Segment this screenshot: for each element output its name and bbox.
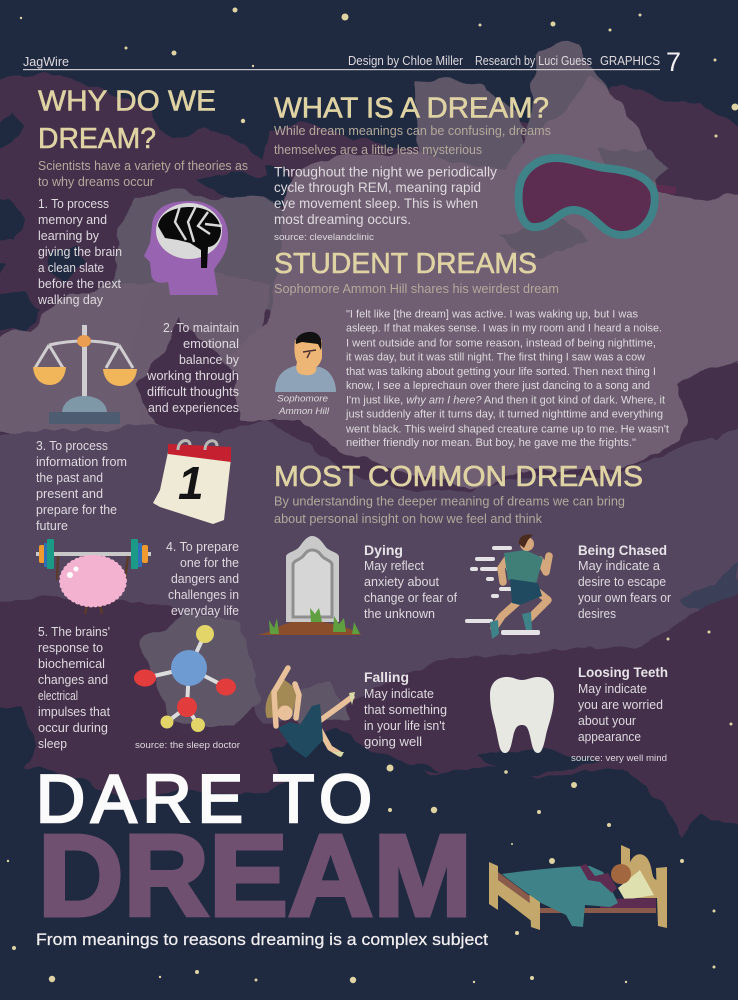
theory 5 text: occur during: [38, 720, 108, 735]
dream: loosing teeth: you are worried: [578, 697, 663, 712]
icon: person sleeping in bed: [489, 845, 667, 930]
dream: loosing teeth: May indicate: [578, 681, 647, 696]
dream: dying: May reflect: [364, 558, 424, 573]
heading: student dreams: STUDENT DREAMS: [274, 248, 537, 280]
quote: asleep. If that makes sense. I was in my room and I heard a noise.: [346, 323, 662, 335]
dream: being chased: your own fears or: [578, 590, 672, 605]
source: sleep doctor: source: the sleep doctor: [135, 740, 240, 751]
theory 2 text: difficult thoughts: [147, 384, 239, 399]
dream: dying: [364, 542, 457, 621]
theory 1 text: learning by: [38, 228, 100, 243]
theory 5 text: [38, 624, 110, 751]
icon: tear-off calendar: [153, 441, 231, 524]
icon: molecule: [134, 625, 236, 732]
dream: falling: Falling: [364, 669, 409, 685]
theory 3 text: present and: [36, 486, 103, 501]
theory 4 text: everyday life: [171, 603, 239, 618]
dream: falling: May indicate: [364, 686, 434, 701]
theory 5 text: sleep: [38, 736, 67, 751]
subheading: about personal insight on how we feel and think: [274, 511, 542, 526]
theory 5 text: biochemical: [38, 656, 105, 671]
panel: what is a dream: [274, 92, 676, 243]
theory 5 text: electrical: [38, 688, 78, 703]
theory 2 text: working through: [146, 368, 239, 383]
caption: portrait: [277, 394, 330, 417]
theory 3 text: information from: [36, 454, 127, 469]
quote: went black. This weird shaped creature came up to me. He wasn't: [345, 423, 669, 435]
icon: running man: [465, 534, 549, 639]
body text: Throughout the night we periodically: [274, 164, 497, 180]
icon: balance scale: [33, 325, 137, 424]
dream: falling: that something: [364, 702, 447, 717]
subheading: [274, 494, 625, 526]
heading: what is a dream: WHAT IS A DREAM?: [274, 92, 549, 124]
theory 3 text: the past and: [36, 470, 103, 485]
theory 1 text: 1. To process: [38, 196, 109, 211]
portrait: Ammon Hill: [275, 332, 336, 392]
header bar: Design by Chloe Miller: [348, 54, 463, 68]
subheading: [274, 123, 551, 157]
dream: loosing teeth: Loosing Teeth: [578, 664, 668, 680]
subheading: Sophomore Ammon Hill shares his weirdest dream: [274, 281, 559, 296]
theory 2 text: balance by: [179, 352, 240, 367]
dream: being chased: May indicate a: [578, 558, 661, 573]
header bar: 7: [666, 47, 681, 77]
header bar: JagWire: [23, 54, 69, 69]
icon: sleep mask: [519, 158, 676, 235]
source: very well mind: source: very well mind: [571, 753, 667, 764]
panel: most common dreams: [257, 461, 672, 764]
theory 3 text: 3. To process: [36, 438, 108, 453]
theory 3 text: future: [36, 518, 68, 533]
theory 1 text: walking day: [37, 292, 104, 307]
title: dare to: DARE TO: [36, 761, 372, 837]
body text: eye movement sleep. This is when: [274, 195, 478, 211]
theory 2 text: emotional: [183, 336, 239, 351]
dream: being chased: [578, 542, 672, 621]
quote: [345, 309, 669, 449]
dream: loosing teeth: about your: [578, 713, 637, 728]
dream: dying: anxiety about: [364, 574, 439, 589]
icon: tooth: [490, 677, 554, 753]
dream: falling: going well: [364, 734, 422, 749]
caption: portrait: Sophomore: [277, 394, 328, 404]
theory 5 text: response to: [38, 640, 103, 655]
theory 5 text: changes and: [38, 672, 108, 687]
theory 4 text: dangers and: [171, 571, 239, 586]
theory 3 text: [36, 438, 127, 533]
subheading: themselves are a little less mysterious: [274, 142, 482, 157]
theory 2 text: and experiences: [148, 400, 239, 415]
header bar: Research by Luci Guess: [475, 54, 592, 68]
body text: most dreaming occurs.: [274, 211, 411, 227]
subheading: By understanding the deeper meaning of dreams we can bring: [274, 494, 625, 508]
quote: it was day, but it was still night. The first thing I saw was a cow: [346, 352, 645, 364]
icon: brain lifting barbell: [36, 539, 151, 614]
dream: being chased: desire to escape: [578, 574, 666, 589]
subheading: theories: [38, 158, 248, 189]
heading: why do we dream: WHY DO WE: [38, 86, 216, 118]
body text: cycle through REM, meaning rapid: [274, 179, 481, 195]
quote: I'm just like, why am I here? And then it got kind of dark. Where, it: [346, 394, 665, 406]
quote: know, I see a leprechaun over there just dancing to a song and: [346, 380, 650, 392]
heading: why do we dream: DREAM?: [38, 123, 156, 155]
heading: most common dreams: MOST COMMON DREAMS: [274, 461, 643, 493]
theory 4 text: challenges in: [168, 587, 239, 602]
theory 2 text: [146, 320, 240, 415]
panel: student dreams: [274, 248, 669, 449]
dream: dying: change or fear of: [364, 590, 457, 605]
theory 1 text: memory and: [38, 212, 107, 227]
heading: why do we dream: [38, 86, 216, 155]
theory 4 text: one for the: [180, 555, 239, 570]
dream: loosing teeth: [578, 664, 668, 744]
panel: why do we dream: [33, 86, 248, 751]
quote: neither friendly nor mean. But boy, he gave me the frights.": [346, 437, 636, 449]
theory 4 text: 4. To prepare: [166, 539, 239, 554]
dream: loosing teeth: appearance: [578, 729, 641, 744]
dream: falling: [364, 669, 447, 749]
background: clouds: [0, 42, 738, 838]
theory 4 text: [166, 539, 239, 618]
theory 2 text: 2. To maintain: [163, 320, 239, 335]
theory 5 text: impulses that: [38, 704, 110, 719]
icon: falling person: [265, 668, 355, 758]
dream: being chased: Being Chased: [578, 542, 667, 558]
subheading: theories: Scientists have a variety of theories as: [38, 158, 248, 173]
header bar: GRAPHICS: [600, 53, 660, 68]
header bar: [23, 47, 681, 77]
dream: dying: the unknown: [364, 606, 435, 621]
theory 3 text: prepare for the: [36, 502, 117, 517]
caption: portrait: Ammon Hill: [278, 406, 330, 417]
dream: falling: in your life isn't: [364, 718, 445, 733]
theory 1 text: giving the brain: [38, 244, 122, 259]
body text: [274, 164, 497, 227]
dream: dying: Dying: [364, 542, 403, 558]
quote: "I felt like [the dream] was active. I was waking up, but I was: [346, 309, 639, 321]
theory 1 text: before the next: [38, 276, 121, 291]
quote: that was talking about getting your life sorted. Then next thing I: [346, 366, 656, 378]
theory 1 text: [37, 196, 122, 307]
quote: I went outside and for some reason, instead of being nighttime,: [346, 338, 656, 350]
title: dream: DREAM: [38, 810, 472, 940]
source: cleveland clinic: source: clevelandclinic: [274, 232, 374, 243]
icon: head with brain: [144, 201, 228, 295]
theory 1 text: a clean slate: [38, 260, 104, 275]
subheading: While dream meanings can be confusing, dreams: [274, 123, 551, 138]
subheading: theories: to why dreams occur: [38, 174, 155, 189]
dream: being chased: desires: [578, 606, 616, 621]
tagline: From meanings to reasons dreaming is a complex subject: [36, 930, 488, 949]
quote: just suddenly after it turns day, it turned nighttime and everything: [345, 408, 663, 420]
icon: gravestone: [257, 536, 362, 635]
theory 5 text: 5. The brains': [38, 624, 110, 639]
icon: tear-off calendar: 1: [178, 457, 204, 509]
